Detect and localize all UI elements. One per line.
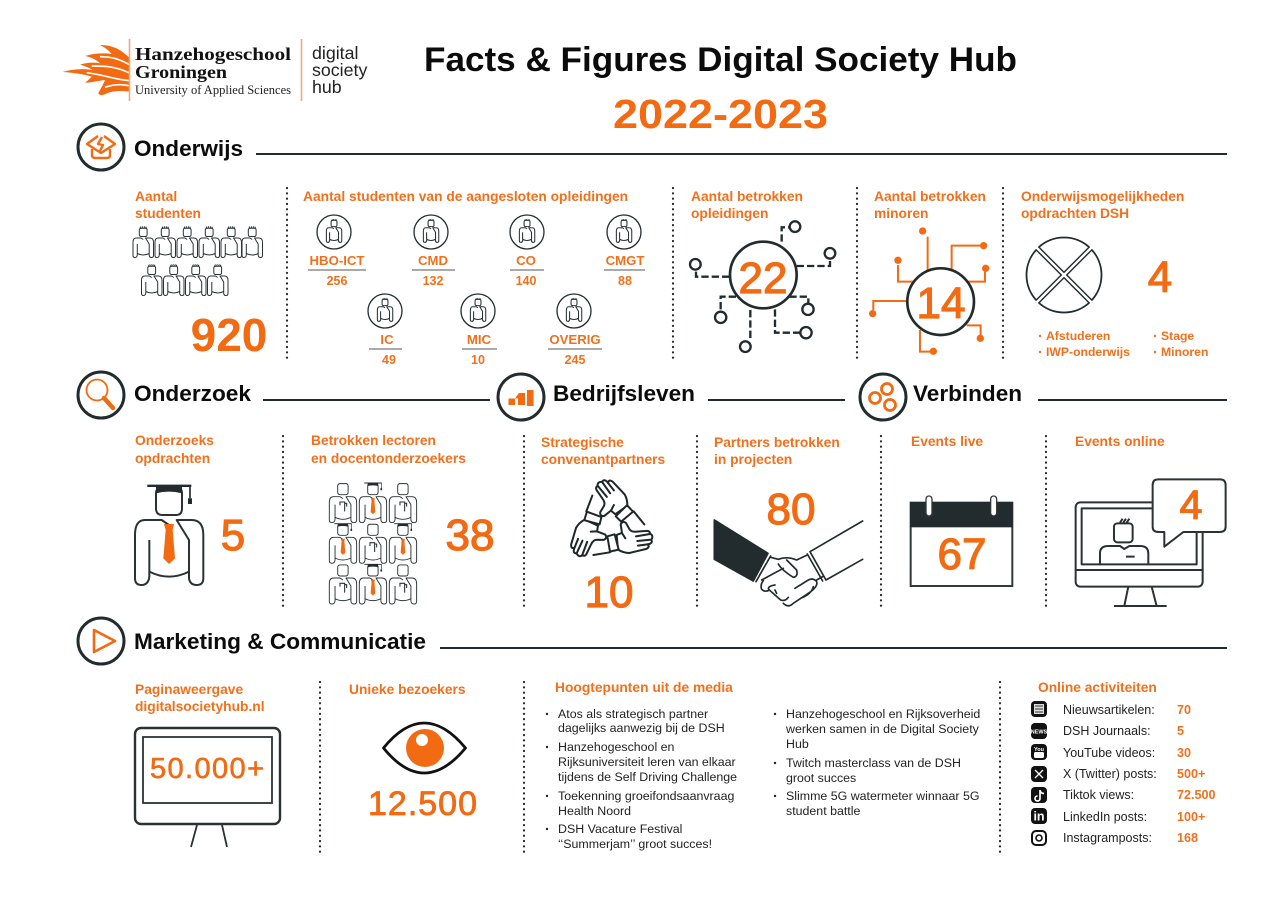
icon: three linked hands <box>563 473 652 563</box>
panel: onderzoeksopdrachten <box>135 433 245 585</box>
programme: CO: CO <box>516 253 536 268</box>
list: media column 1: Toekenning groeifondsaanvraag <box>558 789 734 803</box>
heading: Onderzoek: Onderzoek <box>134 381 252 406</box>
panel: partners in projecten <box>714 435 863 606</box>
panel: betrokken minoren: 14 <box>917 279 965 328</box>
panel: strategische convenantpartners: convenantpartners <box>541 452 666 467</box>
programme: OVERIG <box>548 294 602 367</box>
row: Nieuwsartikelen <box>1031 701 1191 717</box>
panel: unieke bezoekers: 12.500 <box>368 785 477 823</box>
panel: betrokken minoren <box>869 189 989 355</box>
list: media column 2: Hub <box>786 737 809 751</box>
heading: Marketing & Communicatie <box>78 618 1227 664</box>
row: LinkedIn posts: in <box>1033 810 1045 824</box>
icon: monitor 50.000+ <box>135 728 280 847</box>
list: media column 2: Twitch masterclass van de DSH <box>786 756 961 770</box>
icon: orange flame emblem <box>63 45 130 95</box>
logo: Hanzehogeschool Groningen: society <box>312 60 367 80</box>
panel: strategische convenantpartners <box>541 435 666 617</box>
panel: betrokken opleidingen: opleidingen <box>691 206 768 221</box>
panel: partners in projecten: 80 <box>767 485 815 534</box>
panel: Onderwijs <box>78 124 1227 367</box>
panel: events live: Events live <box>911 434 983 449</box>
row: Tiktok views: 72.500 <box>1177 788 1216 802</box>
heading: Bedrijfsleven: Bedrijfsleven <box>553 381 695 406</box>
panel: lectoren en docentonderzoekers: en docentonderzoekers <box>311 451 466 466</box>
row: DSH Journaals: NEWS <box>1031 730 1048 736</box>
panel: hoogtepunten uit de media: Hoogtepunten uit de media <box>555 680 733 695</box>
chart: network 22 <box>690 221 835 352</box>
programme: IC: IC <box>380 332 394 347</box>
icon: grid of lecturers <box>329 483 417 604</box>
chart: network 14 <box>869 227 989 355</box>
list: onderwijsvormen <box>1039 329 1208 359</box>
programme: CO <box>510 215 544 288</box>
row: LinkedIn posts: 100+ <box>1177 810 1205 824</box>
panel: onderzoeksopdrachten: opdrachten <box>135 451 210 466</box>
icon: calendar <box>910 496 1013 586</box>
row: Tiktok views: Tiktok views: <box>1063 788 1134 802</box>
panel: events live: 67 <box>938 530 986 579</box>
panel: paginaweergave: Paginaweergave <box>135 682 243 697</box>
number: 920: 920 <box>191 309 267 361</box>
heading: Onderwijs <box>78 124 1227 170</box>
panel: events live <box>910 434 1013 586</box>
panel: paginaweergave: digitalsocietyhub.nl <box>135 699 265 714</box>
list: onderwijsvormen: IWP-onderwijs <box>1046 345 1130 359</box>
panel: hoogtepunten uit de media <box>546 680 980 851</box>
panel: unieke bezoekers <box>349 682 477 823</box>
row: Instagramposts <box>1032 831 1198 845</box>
panel: aantal studenten <box>133 189 267 361</box>
panel: events online: Events online <box>1075 434 1165 449</box>
list: onderwijsvormen: Stage <box>1161 329 1194 343</box>
icon: graduate <box>135 485 203 585</box>
panel: studenten per opleiding: Aantal studenten van de aangesloten opleidingen <box>303 189 628 204</box>
icon: monitor with speech bubble <box>1076 479 1226 606</box>
panel: betrokken opleidingen: 22 <box>739 254 787 303</box>
row: YouTube videos: 30 <box>1177 746 1191 760</box>
row: X (Twitter) posts: 500+ <box>1177 767 1205 781</box>
list: media column 2: werken samen in de Digital Society <box>785 722 980 736</box>
logo: Hanzehogeschool Groningen: University of Applied Sciences <box>135 83 291 97</box>
list: media column 1: DSH Vacature Festival <box>558 822 682 836</box>
heading: Verbinden <box>860 374 1227 420</box>
programme: OVERIG: 245 <box>565 353 585 367</box>
panel: onderzoeksopdrachten: 5 <box>221 511 245 560</box>
icon: quartered circle <box>1026 238 1102 312</box>
panel: onderwijsmogelijkheden: Onderwijsmogelijkheden <box>1021 189 1184 204</box>
panel: unieke bezoekers: Unieke bezoekers <box>349 682 466 697</box>
list: media column 1: Rijksuniversiteit leren van elkaar <box>558 755 736 769</box>
programme: HBO-ICT: 256 <box>327 274 347 288</box>
panel: lectoren en docentonderzoekers <box>311 433 494 604</box>
list: media column 2: Hanzehogeschool en Rijksoverheid <box>786 707 980 721</box>
panel: aantal studenten: Aantal <box>135 189 177 204</box>
panel: onderzoeksopdrachten: Onderzoeks <box>135 433 214 448</box>
panel: lectoren en docentonderzoekers: 38 <box>446 511 494 560</box>
programme: CMGT: 88 <box>618 274 632 288</box>
row: DSH Journaals <box>1031 723 1184 739</box>
programme: CO: 140 <box>516 274 536 288</box>
row: YouTube videos <box>1031 744 1191 760</box>
logo: Hanzehogeschool Groningen <box>63 39 367 101</box>
programme: IC <box>368 294 402 367</box>
list: media column 1: Hanzehogeschool en <box>558 740 675 754</box>
panel: onderwijsmogelijkheden <box>1021 189 1208 359</box>
row: X (Twitter) posts <box>1031 766 1205 782</box>
list: media column 1: Health Noord <box>558 804 631 818</box>
icon: handshake <box>714 520 863 606</box>
logo: Hanzehogeschool Groningen: hub <box>312 77 342 97</box>
panel: betrokken opleidingen: Aantal betrokken <box>691 189 803 204</box>
panel: partners in projecten: in projecten <box>714 452 792 467</box>
list: media column 2 <box>774 707 980 818</box>
row: X (Twitter) posts: X (Twitter) posts: <box>1063 767 1157 781</box>
programme: CMD: CMD <box>418 253 448 268</box>
heading: Marketing & Communicatie: Marketing & Communicatie <box>134 629 426 654</box>
year heading: 2022-2023 <box>613 91 828 137</box>
programme: CMD: 132 <box>423 274 443 288</box>
list: media column 2: Slimme 5G watermeter winnaar 5G <box>786 789 980 803</box>
programme: CMGT <box>604 215 645 288</box>
panel: onderwijsmogelijkheden: opdrachten DSH <box>1021 206 1129 221</box>
row: Nieuwsartikelen: Nieuwsartikelen: <box>1063 703 1155 717</box>
heading: Onderwijs: Onderwijs <box>134 136 243 161</box>
panel: online activiteiten: Online activiteiten <box>1038 680 1157 695</box>
panel: betrokken minoren: Aantal betrokken <box>874 189 986 204</box>
panel: partners in projecten: Partners betrokken <box>714 435 840 450</box>
list: media column 1 <box>546 707 737 851</box>
row: YouTube videos: YouTube videos: <box>1063 746 1155 760</box>
heading: Verbinden: Verbinden <box>913 381 1022 406</box>
row: Nieuwsartikelen: 70 <box>1177 703 1191 717</box>
list: media column 1: dagelijks aanwezig bij de DSH <box>558 721 725 735</box>
programme: IC: 49 <box>382 353 396 367</box>
logo: Hanzehogeschool Groningen: Groningen <box>135 62 227 82</box>
logo: Hanzehogeschool Groningen: Hanzehogeschool <box>135 44 291 64</box>
programme: HBO-ICT: HBO-ICT <box>310 253 364 268</box>
panel: strategische convenantpartners: 10 <box>585 568 633 617</box>
list: media column 2: groot succes <box>786 771 856 785</box>
heading: Onderzoek <box>78 372 490 418</box>
panel: aantal studenten: studenten <box>135 206 201 221</box>
programme: MIC: MIC <box>467 332 492 347</box>
programme: OVERIG: OVERIG <box>549 332 601 347</box>
logo: Hanzehogeschool Groningen: digital <box>312 43 358 63</box>
list: media column 2: student battle <box>786 804 861 818</box>
row: Tiktok views <box>1031 787 1216 803</box>
panel: studenten per opleiding <box>303 189 645 367</box>
row: Instagramposts: Instagramposts: <box>1063 831 1152 845</box>
panel: events online: 4 <box>1180 482 1202 528</box>
row: DSH Journaals: DSH Journaals: <box>1063 724 1151 738</box>
list: onderwijsvormen: Afstuderen <box>1046 329 1110 343</box>
icon: eye <box>384 723 466 773</box>
heading: Bedrijfsleven <box>498 374 845 420</box>
row: LinkedIn posts <box>1031 808 1205 824</box>
row: DSH Journaals: 5 <box>1177 724 1184 738</box>
programme: MIC: 10 <box>471 353 485 367</box>
row: YouTube videos: You <box>1034 747 1044 753</box>
panel: paginaweergave: 50.000+ <box>150 753 264 785</box>
icon: group of students <box>133 226 262 296</box>
panel: strategische convenantpartners: Strategische <box>541 435 624 450</box>
list: media column 1: Atos als strategisch partner <box>558 707 708 721</box>
panel: betrokken minoren: minoren <box>874 206 928 221</box>
panel: events online <box>1075 434 1226 606</box>
row: Instagramposts: 168 <box>1177 831 1198 845</box>
programme: MIC <box>461 294 497 367</box>
title: Facts & Figures Digital Society Hub <box>424 41 1017 79</box>
row: LinkedIn posts: LinkedIn posts: <box>1063 810 1147 824</box>
programme: CMD <box>412 215 455 288</box>
panel: paginaweergave <box>135 682 280 847</box>
list: media column 1: ‘‘Summerjam’’ groot succes! <box>558 837 712 851</box>
programme: HBO-ICT <box>308 215 366 288</box>
programme: CMGT: CMGT <box>606 253 644 268</box>
panel: lectoren en docentonderzoekers: Betrokken lectoren <box>311 433 436 448</box>
panel: online activiteiten <box>1031 680 1216 845</box>
panel: onderwijsmogelijkheden: 4 <box>1148 253 1172 302</box>
list: onderwijsvormen: Minoren <box>1161 345 1208 359</box>
panel: betrokken opleidingen <box>690 189 835 352</box>
list: media column 1: tijdens de Self Driving Challenge <box>558 770 737 784</box>
